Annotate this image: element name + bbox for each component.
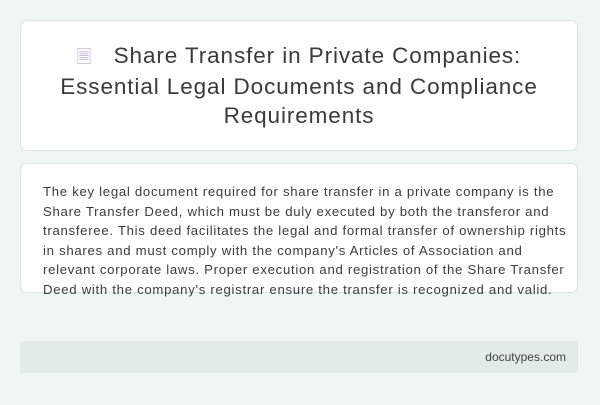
- body text: relevant corporate laws. Proper execution and registration of the Share Transfer: [43, 262, 564, 277]
- footer: [20, 341, 578, 373]
- body text: [43, 184, 566, 297]
- title: Requirements: [224, 103, 374, 128]
- title: Essential Legal Documents and Compliance: [60, 74, 538, 99]
- title: [60, 43, 538, 128]
- footer: docutypes.com: [485, 350, 566, 364]
- title: 🗏 Share Transfer in Private Companies:: [77, 43, 521, 68]
- body text: The key legal document required for share transfer in a private company is the: [43, 184, 554, 199]
- body card: [20, 163, 578, 293]
- body text: Share Transfer Deed, which must be duly executed by both the transferor and: [43, 204, 549, 219]
- title card: [20, 20, 578, 151]
- body text: Deed with the company's registrar ensure the transfer is recognized and valid.: [43, 282, 552, 297]
- body text: in shares and must comply with the company's Articles of Association and: [43, 243, 523, 258]
- body text: transferee. This deed facilitates the legal and formal transfer of ownership rights: [43, 223, 566, 238]
